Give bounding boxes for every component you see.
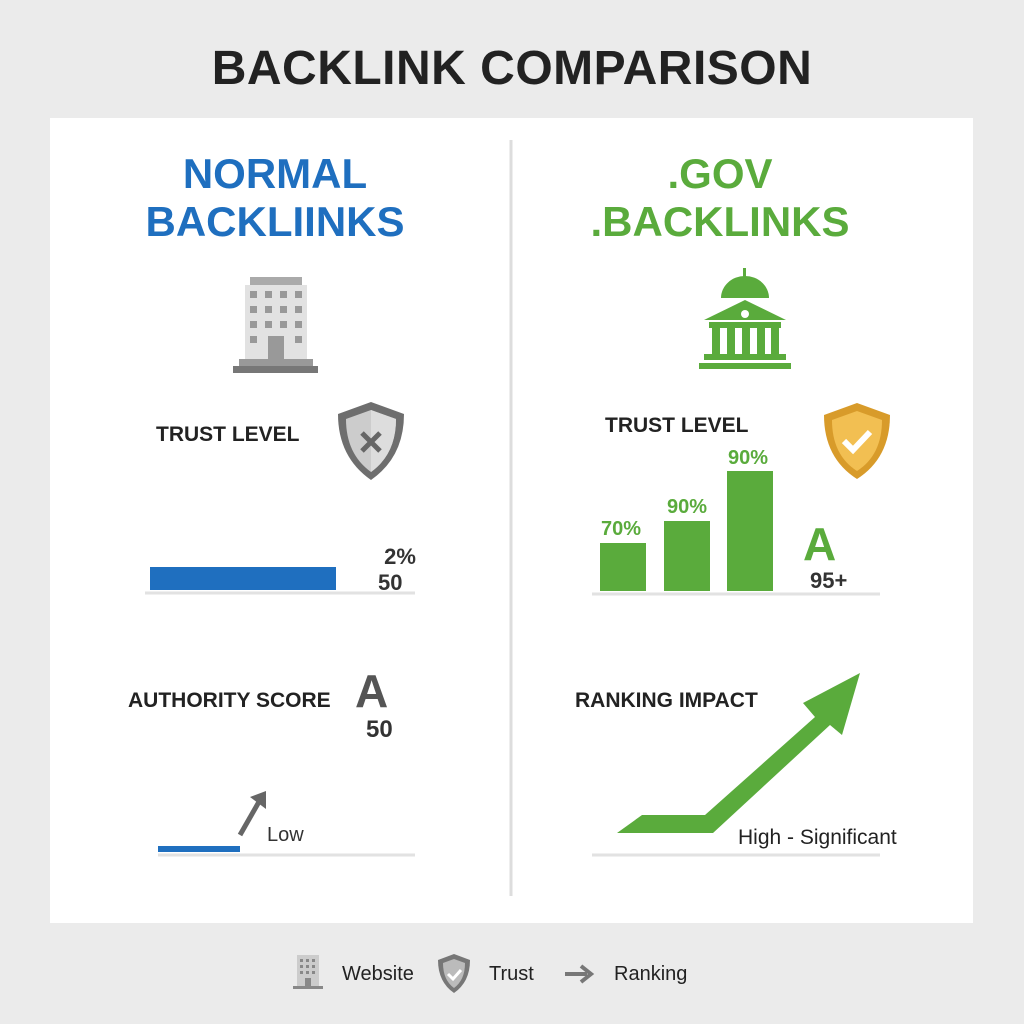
values: 2% 50: 2% <box>384 544 416 569</box>
text: 95+ <box>810 568 847 593</box>
heading: normal backlinks <box>146 150 404 245</box>
value: A 50: A <box>355 665 388 717</box>
icon: legend building <box>293 955 323 989</box>
values: 2% 50 <box>378 544 416 595</box>
label: low: Low <box>267 824 304 846</box>
value: A 95+: A <box>803 518 836 570</box>
label: trust level left: TRUST LEVEL <box>156 423 300 446</box>
icon: legend arrow <box>565 964 594 984</box>
heading: gov backlinks <box>590 150 850 245</box>
legend: Ranking <box>614 963 687 985</box>
label: authority score: AUTHORITY SCORE <box>128 689 331 712</box>
bar chart: gov trust <box>600 447 773 591</box>
label: ranking impact: RANKING IMPACT <box>575 689 758 712</box>
arrow: high ranking <box>617 673 860 833</box>
values: 2% 50: 50 <box>378 570 402 595</box>
icon: government building <box>699 268 791 369</box>
bar chart: gov trust: 90% <box>728 447 768 469</box>
bar chart: gov trust: 90% <box>667 496 707 518</box>
legend <box>293 954 687 993</box>
chart: low ranking <box>158 791 266 852</box>
heading: normal backlinks: BACKLIINKS <box>146 198 404 245</box>
bar chart: gov trust: 70% <box>601 518 641 540</box>
heading: gov backlinks: .GOV <box>667 150 773 197</box>
heading: normal backlinks: NORMAL <box>183 150 367 197</box>
panel: comparison <box>50 118 973 923</box>
icon: shield x <box>338 402 404 480</box>
label: high significant: High - Significant <box>738 826 897 849</box>
text: 50 <box>366 716 393 743</box>
icon: office building <box>233 277 318 373</box>
title: BACKLINK COMPARISON <box>212 42 812 95</box>
icon: gold shield check <box>824 403 890 479</box>
heading: gov backlinks: .BACKLINKS <box>590 198 850 245</box>
icon: legend shield <box>438 954 470 993</box>
legend: Website <box>342 963 414 985</box>
legend: Trust <box>489 963 534 985</box>
label: trust level right: TRUST LEVEL <box>605 414 749 437</box>
bar: normal trust <box>150 567 336 590</box>
